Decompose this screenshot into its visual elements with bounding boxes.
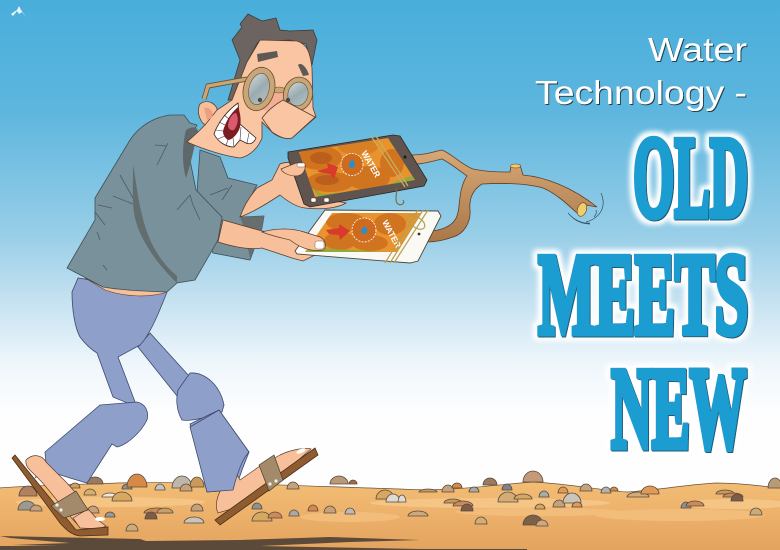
trousers <box>35 278 249 492</box>
lower tablet <box>295 210 441 263</box>
upper tablet: WATER <box>359 149 383 179</box>
motion lines at branch tip <box>568 193 603 224</box>
hair back <box>228 14 317 100</box>
heading line one: Water <box>648 31 747 68</box>
face <box>187 40 316 158</box>
ground shadow <box>0 536 527 550</box>
bare midriff <box>85 270 167 296</box>
ear inner <box>204 108 213 120</box>
branch dowsing rod <box>412 150 597 242</box>
lower thumbnail <box>315 241 324 249</box>
mouth with teeth <box>214 103 256 147</box>
nose <box>262 100 315 139</box>
upper tablet <box>288 135 427 207</box>
heading: Water Technology <box>535 31 747 111</box>
sandal and foot: back foot <box>12 455 108 536</box>
blush <box>254 87 308 113</box>
sleeve inner shadow <box>240 216 264 258</box>
trouser hem overlaps <box>190 410 249 492</box>
sandal and foot: front foot <box>215 447 318 525</box>
glasses <box>204 64 316 114</box>
tongue <box>228 113 238 130</box>
lower arm and hand <box>218 220 325 261</box>
shirt <box>67 115 232 292</box>
far shirt sleeve <box>195 150 264 260</box>
upper hand thumb <box>281 163 305 176</box>
head <box>187 14 317 158</box>
mouth interior <box>223 107 241 140</box>
ear <box>198 102 218 126</box>
tooth separators <box>216 115 249 147</box>
lower tablet: WATER <box>380 218 403 249</box>
desert ground <box>0 482 780 550</box>
eyebrows <box>257 51 278 62</box>
upper arm and hand <box>240 162 346 217</box>
lower hand thumb <box>262 229 325 251</box>
headline: Old Meets New <box>538 114 748 473</box>
pebbles <box>18 471 780 531</box>
heading line two: Technology - <box>535 74 747 111</box>
upper hand fingernails <box>297 163 329 202</box>
artist signature mark <box>11 6 27 18</box>
